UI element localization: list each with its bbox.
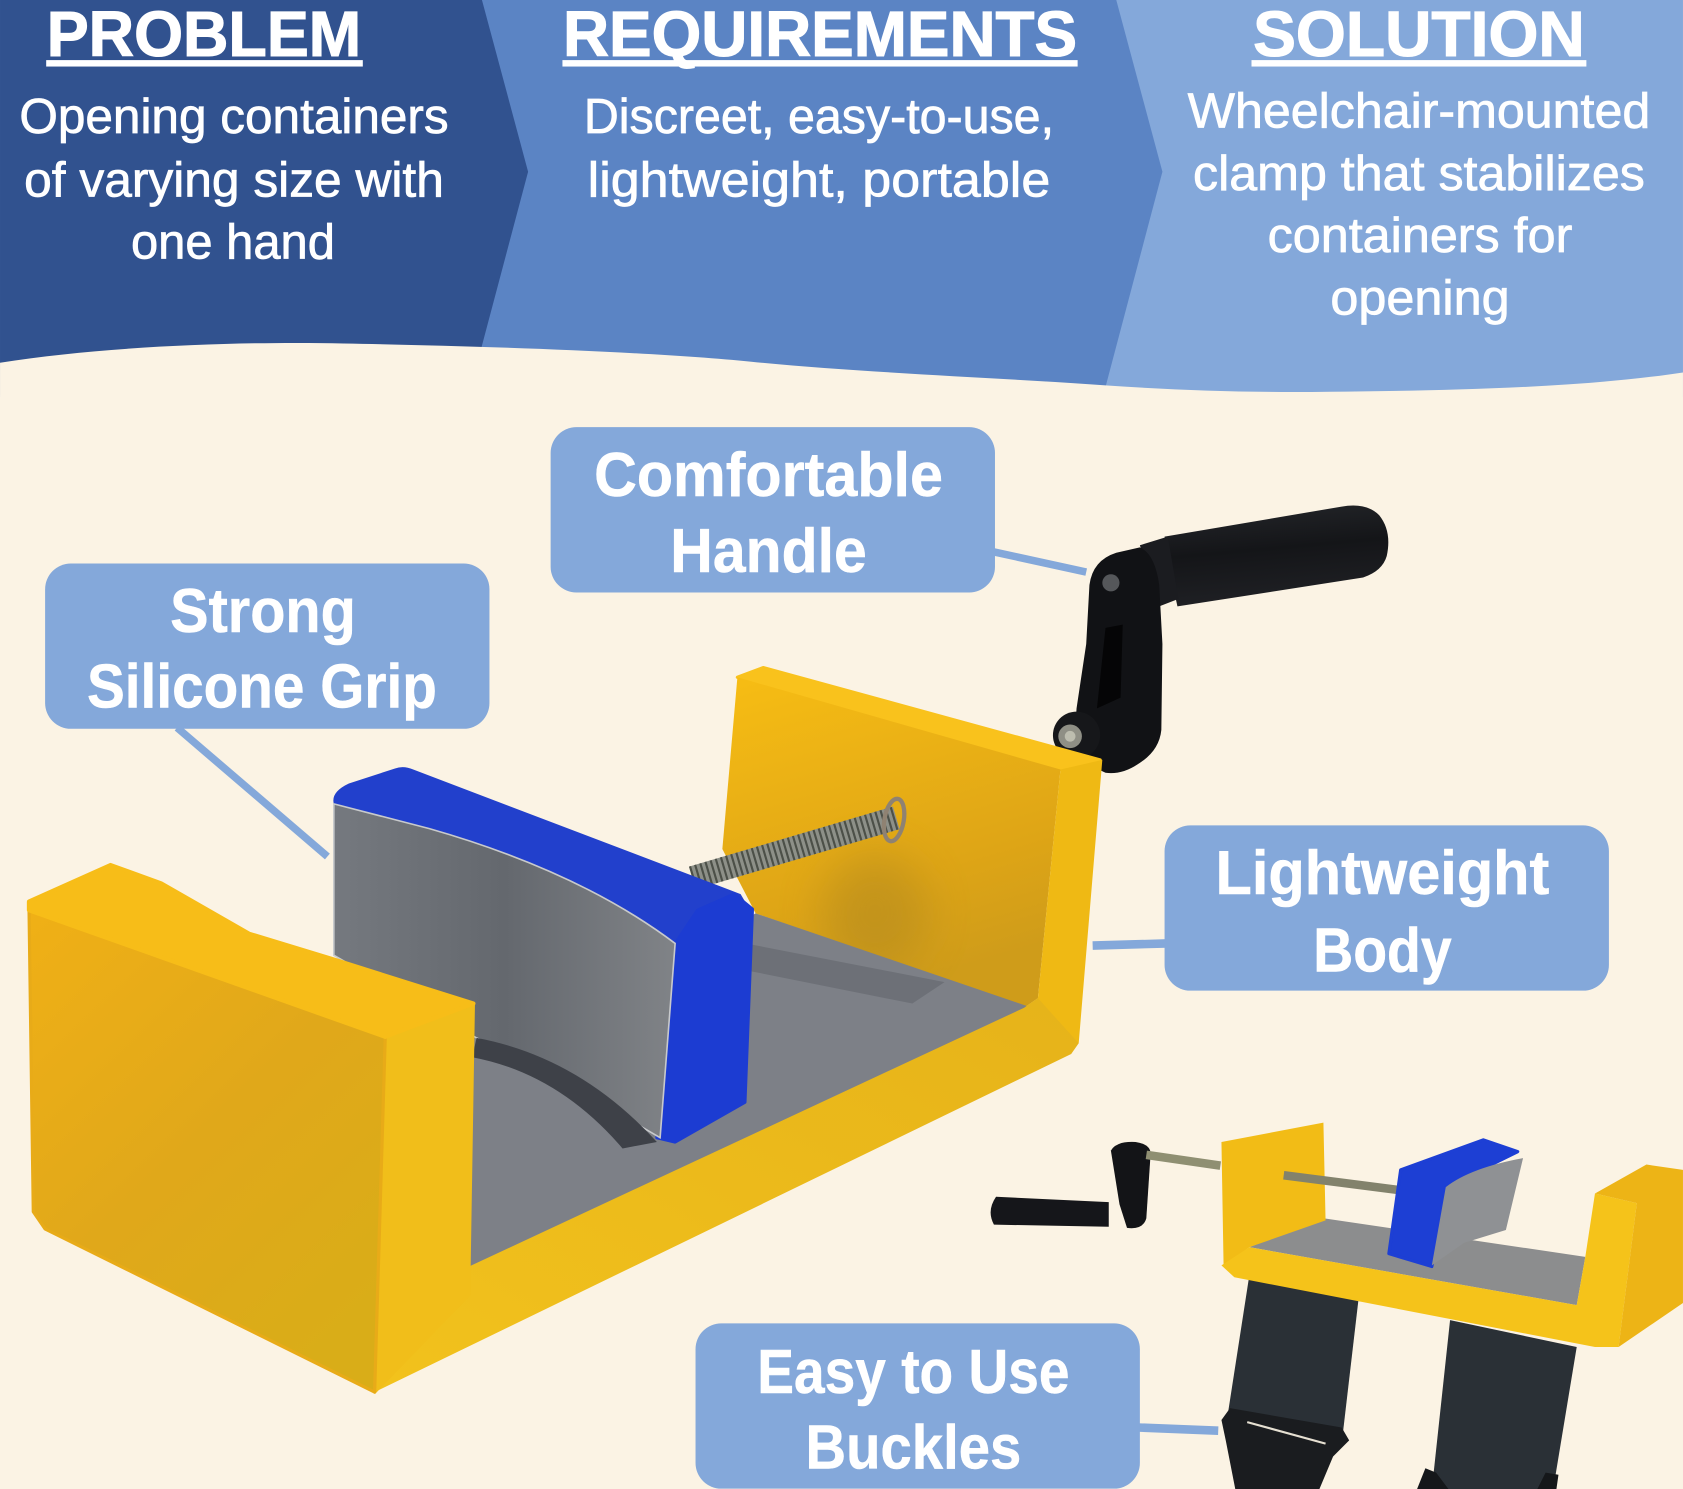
text: solution description [1188,84,1650,325]
front block right edge [375,1004,473,1392]
connector: silicone grip [177,728,327,856]
connector: buckles [1138,1427,1218,1431]
text: problem description: of varying size with [24,152,444,207]
strap right [1432,1320,1577,1489]
screw [692,797,907,878]
callout: comfortable handle: Comfortable [594,441,943,510]
upright shadow [821,853,928,971]
panel: solution [0,0,1683,397]
main clamp photo [29,506,1388,1392]
text: solution description: opening [1330,270,1510,325]
small base [1221,1194,1637,1347]
blue block right face [657,894,752,1142]
text: solution description: containers for [1268,208,1572,263]
callout: strong silicone grip: Strong [170,577,356,646]
crank arm detail [1053,574,1123,759]
small blue block [1389,1140,1518,1267]
text: requirements description: Discreet, easy-to-use, [584,89,1054,144]
connector: body [1093,943,1167,946]
callout: lightweight body: Lightweight [1216,839,1549,908]
callout: comfortable handle: Handle [670,517,867,586]
rear upright top [737,668,1100,770]
base lip [375,998,1079,1392]
small gray pad [1432,1158,1523,1265]
connector: handle [993,552,1086,572]
callout: lightweight body [1165,825,1609,991]
text: solution description: clamp that stabilizes [1193,146,1645,201]
crank arm [1073,547,1162,773]
text: solution description: Wheelchair-mounted [1188,84,1650,139]
text: problem description: Opening containers [19,89,449,144]
text: problem description: one hand [131,215,335,270]
buckle slot [1247,1422,1326,1444]
pad shadow [472,1038,657,1148]
small gray floor [1249,1218,1585,1305]
crank handle grip [1165,506,1388,606]
buckle right tabs [1417,1468,1558,1489]
callout: easy to use buckles: Buckles [806,1413,1021,1482]
strap left [1226,1275,1359,1444]
gray floor [468,913,1030,1275]
small crank arm [1111,1142,1151,1228]
small screw rear [1146,1155,1220,1166]
callout: lightweight body: Body [1313,916,1452,985]
callout: strong silicone grip: Silicone Grip [87,652,437,721]
panel: requirements [0,0,1162,395]
blue block top [333,767,751,955]
callout: easy to use buckles [696,1323,1140,1489]
callout: strong silicone grip [45,563,489,729]
crank thread neck [1140,537,1179,606]
floor strip shadow [751,945,945,1004]
front block face [29,907,385,1392]
rear upright edge [1024,760,1102,1043]
small clamp photo with straps [991,1123,1683,1489]
small rear upright [1221,1123,1326,1267]
wave edge [0,343,1683,1489]
front block top [29,865,473,1037]
rear upright face [722,677,1060,1008]
callout: easy to use buckles: Easy to Use [757,1338,1070,1407]
text: requirements description: lightweight, portable [588,152,1050,207]
small right upright [1595,1165,1683,1347]
buckle left [1221,1408,1349,1489]
panel: problem [0,0,528,370]
text: problem description [19,89,449,270]
text: requirements description [584,89,1054,207]
small screw front [1284,1175,1401,1190]
small grip [991,1197,1109,1227]
gray silicone pad [334,804,675,1138]
callout: comfortable handle [551,427,995,592]
